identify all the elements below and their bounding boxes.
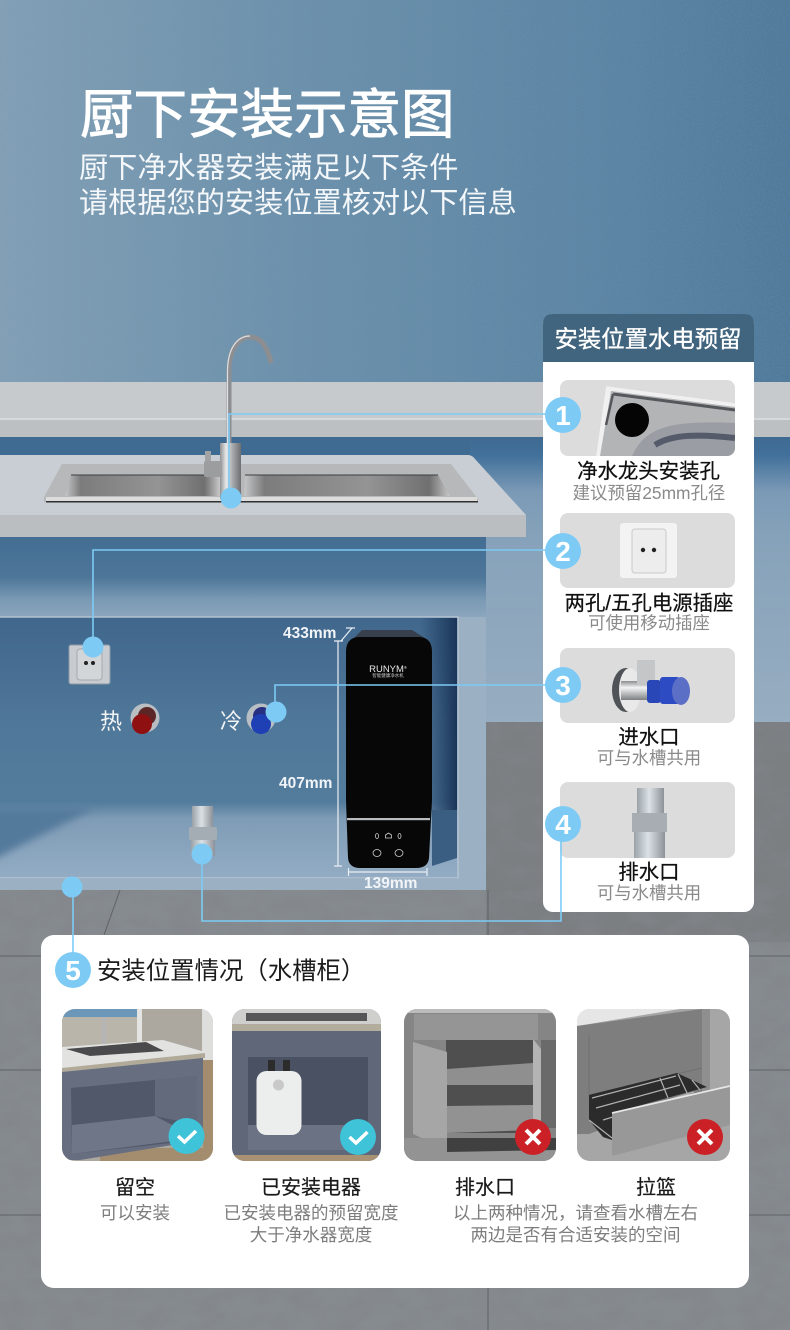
- stainless sink: [44, 464, 478, 502]
- caption: shared note: [453, 1203, 698, 1245]
- number badges 1 to 4: 1: [555, 400, 571, 431]
- caption: shared note: 以上两种情况，请查看水槽左右: [453, 1203, 698, 1223]
- item 1: faucet hole: 净水龙头安装孔: [577, 460, 720, 483]
- kitchen counter with sink: [0, 455, 526, 537]
- hot water valve: 热: [100, 709, 122, 734]
- back counter shelf: [0, 382, 790, 455]
- item 1: faucet hole: 建议预留25mm孔径: [573, 483, 725, 503]
- line to badge 5: [72, 935, 74, 960]
- cold water valve: 冷: [220, 709, 242, 734]
- caption: with appliance: 大于净水器宽度: [250, 1225, 372, 1245]
- caption: shared note: 两边是否有合适安装的空间: [470, 1225, 680, 1245]
- water purifier unit: ®: [404, 665, 407, 670]
- caption: with appliance: 已安装电器的预留宽度: [224, 1203, 398, 1223]
- caption: pull basket: 拉篮: [636, 1176, 676, 1199]
- caption: empty: 可以安装: [100, 1203, 170, 1223]
- check badge: [168, 1118, 204, 1154]
- number badges 1 to 4: 4: [555, 809, 571, 840]
- caption: with appliance: [224, 1176, 398, 1245]
- item 2: power socket: 两孔/五孔电源插座: [565, 592, 733, 615]
- right wall section: [470, 437, 790, 722]
- item 3: water inlet valve: [560, 648, 735, 768]
- cabinet recess opening: [0, 617, 458, 879]
- dimension lines and labels: 433mm: [283, 625, 336, 642]
- dimension lines and labels: [279, 625, 427, 892]
- anchor dots: [62, 488, 286, 898]
- number badges 1 to 4: [545, 397, 581, 842]
- hot water valve: [100, 704, 160, 734]
- cross badge: [515, 1119, 551, 1155]
- panel heading: 安装位置情况（水槽柜）: [97, 958, 365, 985]
- subtitle lines: [79, 152, 517, 220]
- cross badge: [687, 1119, 723, 1155]
- background: blue wall: [0, 0, 790, 440]
- panel: installation position situations: [41, 935, 749, 1288]
- item 4: drain outlet: [560, 782, 735, 903]
- number badges 1 to 4: 2: [555, 536, 571, 567]
- wall socket: [69, 645, 110, 684]
- item 4: drain outlet: 可与水槽共用: [597, 883, 701, 903]
- caption: drain: 排水口: [455, 1176, 515, 1199]
- purifier faucet: [204, 336, 271, 499]
- item 4: drain outlet: 排水口: [618, 861, 680, 884]
- panel header: 安装位置水电预留: [554, 326, 742, 352]
- badge 5: 5: [65, 955, 81, 986]
- item 1: faucet hole: [560, 380, 735, 503]
- cabinet photo: with appliance: [232, 1009, 381, 1161]
- water purifier unit: RUNYM: [369, 664, 404, 675]
- water purifier unit: [346, 630, 432, 868]
- badge 5: [55, 952, 91, 988]
- panel header: [543, 314, 754, 362]
- item 2: power socket: [560, 513, 735, 633]
- subtitle lines: 厨下净水器安装满足以下条件: [79, 152, 458, 184]
- cabinet photo: pull basket: [577, 1009, 730, 1161]
- caption: empty: 留空: [115, 1176, 155, 1199]
- cabinet frame: [0, 537, 486, 890]
- floor: grey stone tiles: [0, 722, 790, 1330]
- drain pipe: [189, 806, 217, 856]
- leader lines: [73, 414, 561, 970]
- item 3: water inlet valve: 可与水槽共用: [597, 748, 701, 768]
- page title: 厨下安装示意图: [80, 86, 454, 145]
- number badges 1 to 4: 3: [555, 670, 571, 701]
- caption: with appliance: 已安装电器: [261, 1176, 361, 1199]
- cold water valve: [220, 704, 276, 734]
- water purifier unit: 智能健康净水机: [372, 672, 404, 679]
- item 3: water inlet valve: 进水口: [618, 726, 680, 749]
- check badge: [340, 1119, 376, 1155]
- panel: water and power reservations: [543, 314, 754, 912]
- dimension lines and labels: 139mm: [364, 875, 417, 892]
- cabinet photo: empty: [62, 1009, 213, 1161]
- cabinet photo: drain cabinet: [404, 1009, 556, 1161]
- caption: empty: [100, 1176, 170, 1223]
- subtitle lines: 请根据您的安装位置核对以下信息: [79, 186, 517, 220]
- dimension lines and labels: 407mm: [279, 775, 332, 792]
- item 2: power socket: 可使用移动插座: [588, 613, 710, 633]
